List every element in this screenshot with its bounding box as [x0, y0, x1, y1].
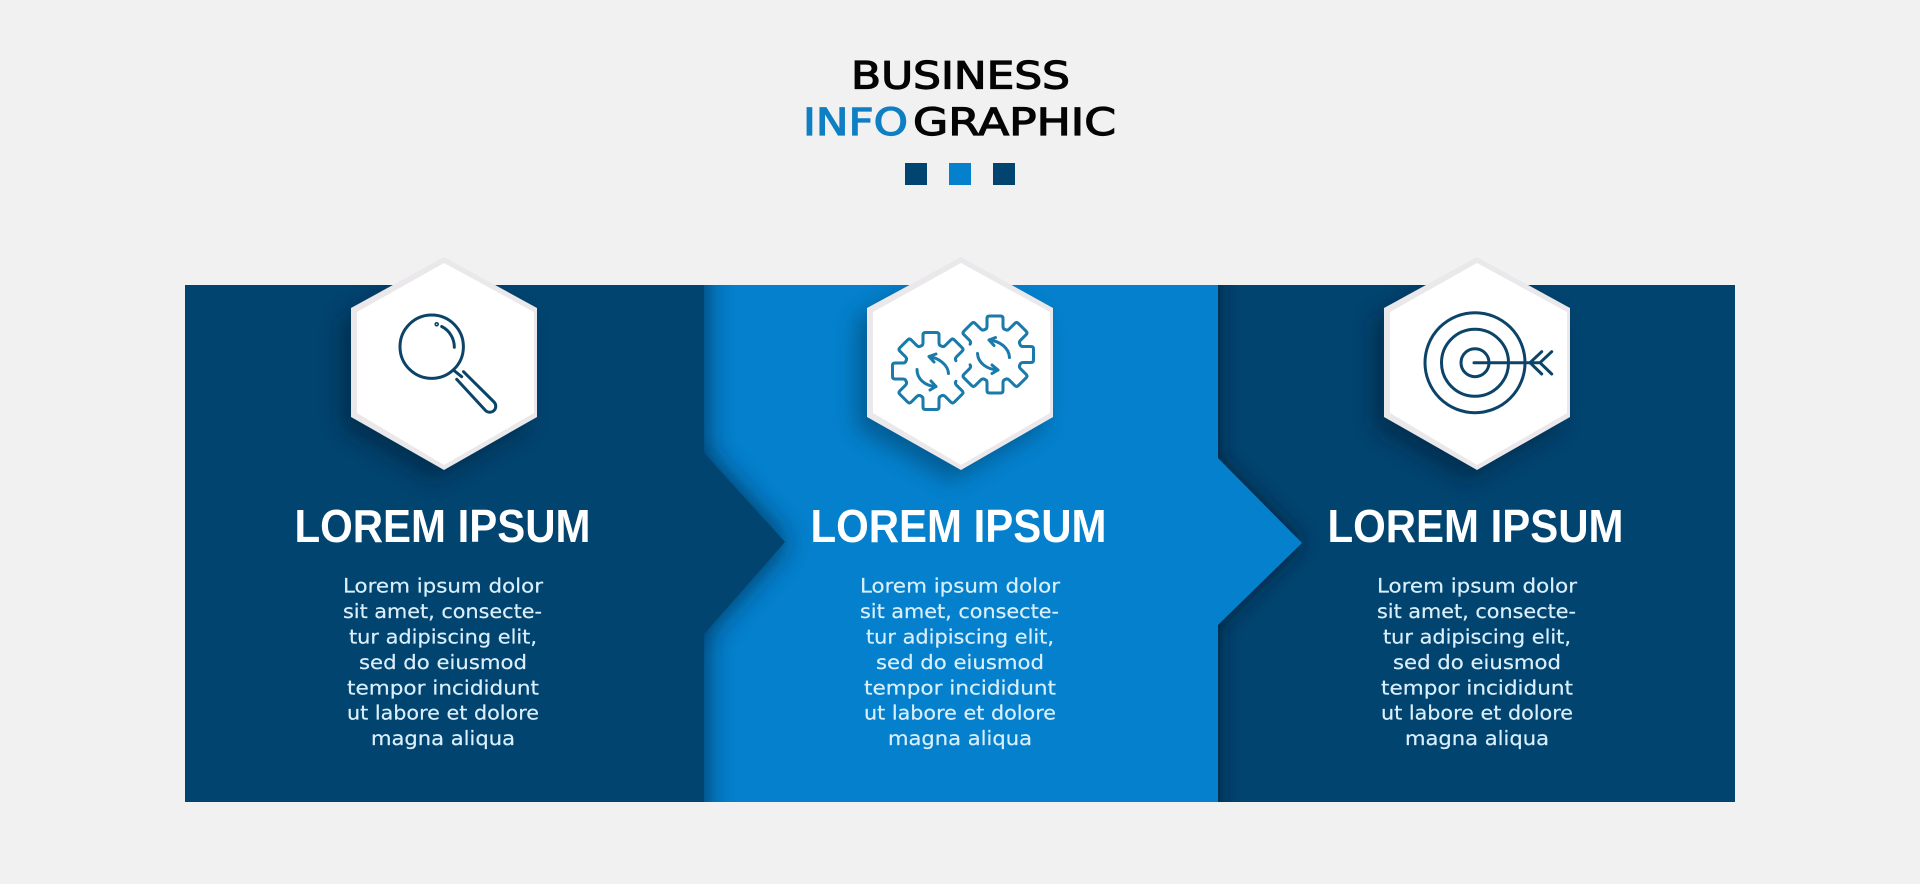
icon: gears	[892, 316, 1034, 410]
body text: step 3: magna aliqua	[1405, 727, 1549, 750]
panel: step 2	[704, 258, 1302, 802]
body text: step 1: Lorem ipsum dolor	[343, 575, 544, 598]
body text: step 3: tur adipiscing elit,	[1383, 626, 1571, 648]
panel: step 1	[185, 257, 785, 802]
icon: target with arrow	[1425, 313, 1552, 413]
body text: step 2: magna aliqua	[888, 727, 1032, 750]
body text: step 1: ut labore et dolore	[347, 702, 539, 725]
title	[803, 54, 1116, 144]
body text: step 3: sit amet, consecte-	[1377, 600, 1576, 623]
title: INFO	[803, 100, 908, 144]
hexagon: step 2	[867, 257, 1053, 470]
hexagon: step 3	[1384, 257, 1570, 470]
body text: step 3: tempor incididunt	[1381, 676, 1573, 699]
title: BUSINESS	[851, 54, 1070, 98]
heading: step 3: LOREM IPSUM	[1328, 500, 1624, 552]
body text: step 2: tempor incididunt	[864, 676, 1056, 699]
heading: step 1: LOREM IPSUM	[294, 500, 590, 552]
body text: step 2: sed do eiusmod	[876, 651, 1044, 674]
body text: step 1: sit amet, consecte-	[343, 600, 542, 623]
title: GRAPHIC	[913, 100, 1116, 144]
body text: step 1: sed do eiusmod	[359, 651, 527, 674]
heading: step 2: LOREM IPSUM	[810, 500, 1106, 552]
body text: step 2: Lorem ipsum dolor	[860, 575, 1061, 598]
hexagon: step 1	[351, 257, 537, 470]
body text: step 1: tempor incididunt	[347, 676, 539, 699]
body text: step 2: ut labore et dolore	[864, 702, 1056, 725]
body text: step 2: tur adipiscing elit,	[866, 626, 1054, 648]
body text: step 2: sit amet, consecte-	[860, 600, 1059, 623]
icon: magnifying glass	[400, 315, 496, 412]
body text: step 3: ut labore et dolore	[1381, 702, 1573, 725]
body text: step 3: sed do eiusmod	[1393, 651, 1561, 674]
body text: step 3	[1377, 575, 1578, 750]
title squares	[905, 163, 1015, 185]
panel: step 3	[1218, 258, 1735, 802]
body text: step 2	[860, 575, 1061, 750]
body text: step 1: tur adipiscing elit,	[349, 626, 537, 648]
body text: step 1	[343, 575, 544, 750]
body text: step 3: Lorem ipsum dolor	[1377, 575, 1578, 598]
body text: step 1: magna aliqua	[371, 727, 515, 750]
